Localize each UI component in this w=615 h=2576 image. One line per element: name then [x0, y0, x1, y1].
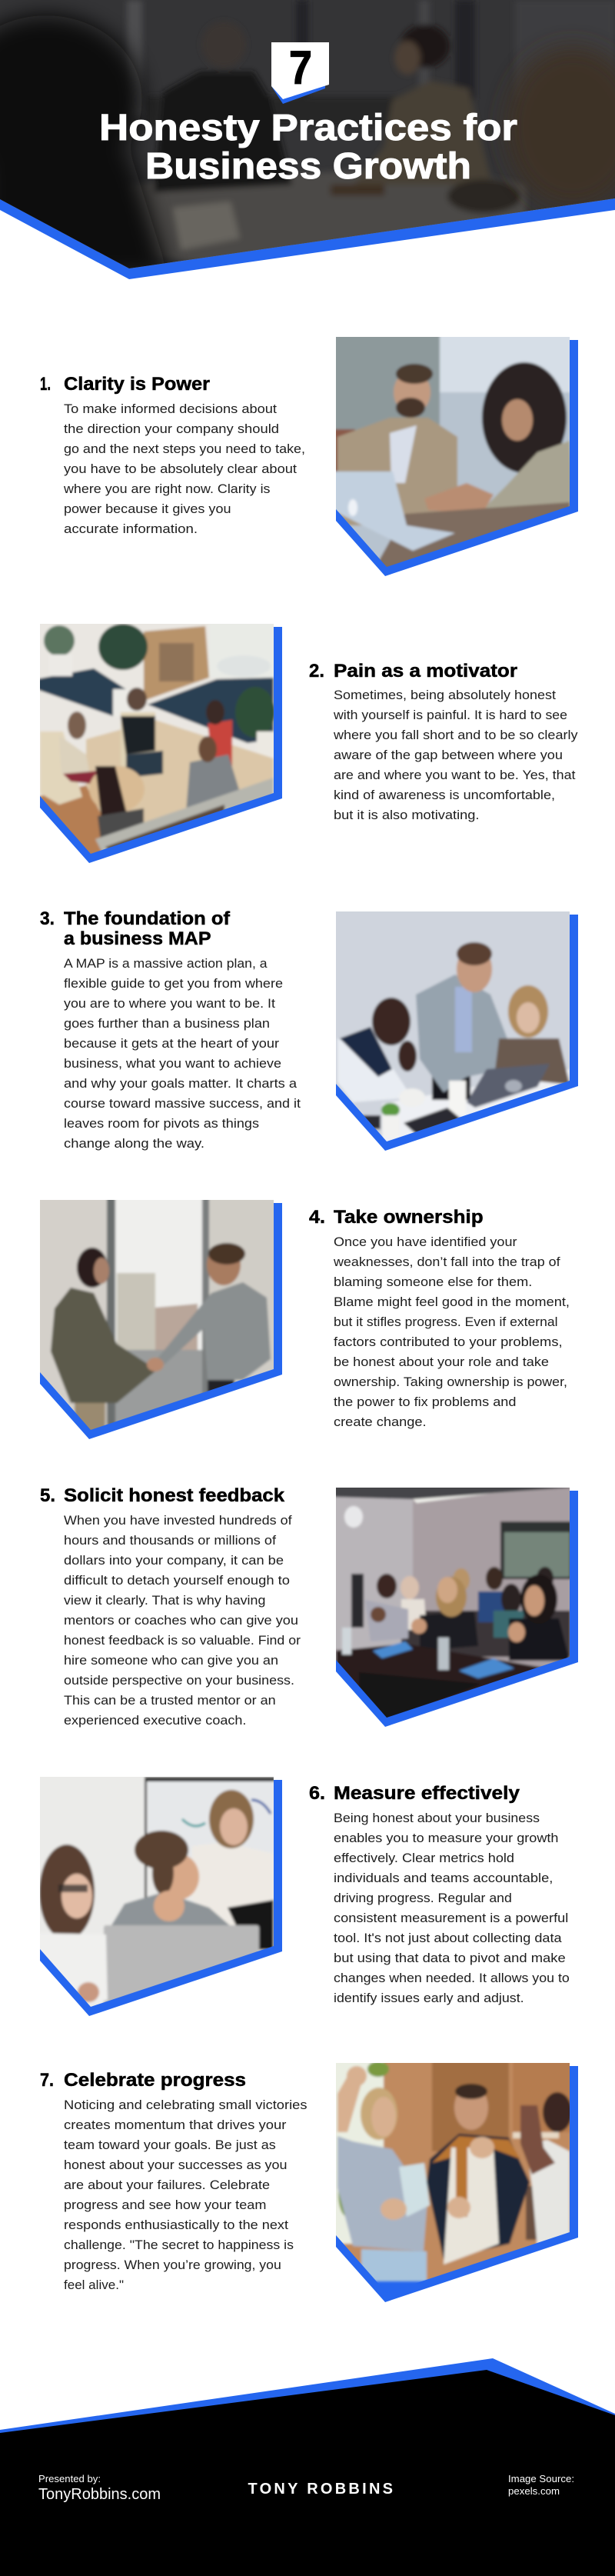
main title	[99, 108, 517, 187]
body text 1	[63, 402, 305, 536]
body text 2	[333, 688, 578, 822]
body text 7: feel alive."	[64, 2278, 124, 2292]
body text 3: change along the way.	[64, 1137, 204, 1151]
image source	[508, 2473, 574, 2497]
body text 1: power because it gives you	[64, 502, 231, 516]
body text 7: challenge. "The secret to happiness is	[64, 2238, 294, 2252]
section 4	[36, 1196, 570, 1439]
body text 4	[333, 1235, 570, 1429]
body text 2: with yourself is painful. It is hard to see	[333, 708, 567, 722]
photo 7: team celebrating	[332, 2059, 578, 2302]
presented by	[38, 2473, 161, 2503]
body text 6: individuals and teams accountable,	[334, 1871, 553, 1885]
body text 1: To make informed decisions about	[64, 402, 277, 416]
body text 7: creates momentum that drives your	[64, 2118, 287, 2132]
body text 5: hire someone who can give you an	[64, 1654, 278, 1668]
header photo: meeting	[0, 0, 615, 277]
body text 7: responds enthusiastically to the next	[64, 2218, 288, 2232]
main title: Business Growth	[145, 146, 471, 187]
photo 1: two colleagues at laptop	[332, 333, 578, 576]
header	[0, 0, 615, 279]
heading 7: Celebrate progress	[64, 2070, 246, 2091]
body text 4: Blame might feel good in the moment,	[334, 1295, 570, 1309]
presented by: Presented by:	[38, 2473, 101, 2484]
heading 5: Solicit honest feedback	[64, 1485, 285, 1506]
body text 3: because it gets at the heart of your	[64, 1037, 280, 1051]
heading 3	[40, 908, 231, 949]
photo 3: three colleagues around laptop	[332, 908, 578, 1151]
section 6	[36, 1773, 570, 2016]
footer blue accent	[0, 2358, 615, 2434]
body text 6: identify issues early and adjust.	[334, 1991, 524, 2005]
body text 1: go and the next steps you need to take,	[64, 442, 305, 456]
body text 1: the direction your company should	[64, 422, 279, 436]
header blue accent	[0, 198, 615, 279]
photo 6: team looking at laptop	[36, 1773, 282, 2016]
body text 2: are and where you want to be. Yes, that	[334, 768, 576, 782]
main title: Honesty Practices for	[99, 108, 517, 148]
body text 6: but using that data to pivot and make	[334, 1951, 566, 1965]
body text 1: accurate information.	[64, 522, 198, 536]
body text 6: enables you to measure your growth	[334, 1831, 558, 1845]
image source: pexels.com	[508, 2485, 560, 2497]
body text 6	[334, 1811, 570, 2005]
section 5	[40, 1484, 578, 1728]
body text 5: outside perspective on your business.	[64, 1674, 294, 1688]
photo 5: applauding conference room	[332, 1484, 578, 1727]
section 3	[40, 908, 578, 1151]
body text 4: weaknesses, don’t fall into the trap of	[333, 1255, 560, 1269]
body text 7	[64, 2098, 308, 2292]
body text 5: honest feedback is so valuable. Find or	[64, 1634, 301, 1648]
heading 3: The foundation of	[64, 908, 231, 929]
body text 7: progress. When you’re growing, you	[64, 2258, 281, 2272]
heading 4: 4.	[309, 1207, 325, 1228]
image source: Image Source:	[508, 2473, 574, 2484]
photo 4: handshake at window	[36, 1196, 282, 1439]
presented by: TonyRobbins.com	[38, 2486, 161, 2503]
section 2	[36, 620, 578, 863]
body text 5: mentors or coaches who can give you	[64, 1614, 298, 1628]
body text 6: driving progress. Regular and	[334, 1891, 512, 1905]
body text 3: flexible guide to get you from where	[64, 977, 283, 991]
body text 4: factors contributed to your problems,	[334, 1335, 563, 1349]
body text 3	[64, 957, 301, 1151]
heading 6: 6.	[309, 1783, 325, 1804]
body text 3: leaves room for pivots as things	[64, 1117, 259, 1131]
body text 6: changes when needed. It allows you to	[334, 1971, 570, 1985]
heading 3: a business MAP	[64, 928, 211, 949]
body text 4: create change.	[334, 1415, 427, 1429]
heading 2: Pain as a motivator	[334, 661, 517, 681]
heading 3: 3.	[40, 908, 55, 929]
body text 2: but it is also motivating.	[334, 808, 480, 822]
body text 6: consistent measurement is a powerful	[334, 1911, 568, 1925]
body text 4: the power to fix problems and	[334, 1395, 516, 1409]
badge number: 7	[289, 42, 312, 94]
body text 5: view it clearly. That is why having	[64, 1594, 265, 1608]
body text 4: blaming someone else for them.	[334, 1275, 532, 1289]
heading 4: Take ownership	[334, 1207, 484, 1228]
logo wordmark: TONY ROBBINS	[248, 2481, 393, 2498]
body text 5	[64, 1514, 301, 1728]
heading 2: 2.	[309, 661, 324, 681]
body text 2: aware of the gap between where you	[334, 748, 563, 762]
body text 3: you are to where you want to be. It	[64, 997, 275, 1011]
body text 3: A MAP is a massive action plan, a	[64, 957, 268, 971]
heading 7: 7.	[40, 2070, 54, 2091]
body text 7: are about your failures. Celebrate	[64, 2178, 270, 2192]
body text 4: be honest about your role and take	[334, 1355, 549, 1369]
body text 6: effectively. Clear metrics hold	[334, 1851, 514, 1865]
badge white shape	[271, 42, 329, 99]
heading 1: Clarity is Power	[64, 374, 210, 395]
body text 4: ownership. Taking ownership is power,	[334, 1375, 567, 1389]
heading 1: 1.	[40, 374, 51, 395]
body text 3: business, what you want to achieve	[64, 1057, 281, 1071]
section 1	[40, 333, 578, 576]
body text 7: team toward your goals. Be just as	[64, 2138, 276, 2152]
body text 5: dollars into your company, it can be	[64, 1554, 284, 1568]
badge	[271, 42, 329, 104]
body text 2: Sometimes, being absolutely honest	[334, 688, 556, 702]
body text 4: Once you have identified your	[334, 1235, 517, 1249]
body text 5: This can be a trusted mentor or an	[64, 1694, 276, 1708]
heading 5: 5.	[40, 1485, 55, 1506]
body text 3: goes further than a business plan	[64, 1017, 270, 1031]
body text 2: where you fall short and to be so clearly	[333, 728, 578, 742]
body text 1: where you are right now. Clarity is	[63, 482, 270, 496]
badge blue shadow	[271, 85, 325, 104]
body text 6: tool. It's not just about collecting data	[334, 1931, 562, 1945]
body text 4: but it stifles progress. Even if external	[334, 1315, 558, 1329]
body text 2: kind of awareness is uncomfortable,	[334, 788, 555, 802]
section 7	[40, 2059, 578, 2302]
footer	[0, 2358, 615, 2576]
body text 3: and why your goals matter. It charts a	[64, 1077, 298, 1091]
body text 5: difficult to detach yourself enough to	[64, 1574, 290, 1588]
body text 1: you have to be absolutely clear about	[64, 462, 297, 476]
body text 5: hours and thousands or millions of	[64, 1534, 276, 1548]
body text 6: Being honest about your business	[334, 1811, 540, 1825]
footer black panel	[0, 2370, 615, 2576]
body text 3: course toward massive success, and it	[64, 1097, 301, 1111]
heading 6: Measure effectively	[334, 1783, 520, 1804]
photo 2: group meeting in lounge	[36, 620, 282, 863]
body text 7: progress and see how your team	[64, 2198, 266, 2212]
body text 7: Noticing and celebrating small victories	[64, 2098, 308, 2112]
body text 5: experienced executive coach.	[64, 1714, 246, 1728]
body text 7: honest about your successes as you	[64, 2158, 288, 2172]
body text 5: When you have invested hundreds of	[64, 1514, 292, 1528]
